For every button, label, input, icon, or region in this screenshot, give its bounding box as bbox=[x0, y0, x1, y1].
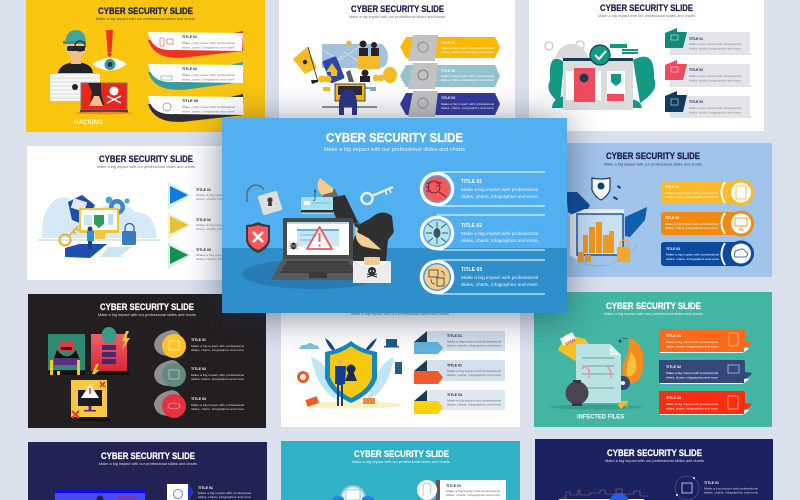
row: yellow arrow item: TITLE 01 bbox=[441, 41, 455, 45]
text: middle slide subtitle: Make a big impact with our professional slides and charts bbox=[351, 312, 449, 316]
row: orange pill item: Make a big impact with professional bbox=[665, 222, 718, 226]
icon: alert eye bbox=[92, 30, 127, 70]
row: navy flag item: slides, charts, infographics and more bbox=[689, 110, 742, 114]
row: main title 02: Make a big impact with professional bbox=[461, 231, 538, 236]
row: gold pill item: slides, charts, infographics and more bbox=[665, 195, 719, 199]
row: red blob item bbox=[154, 390, 245, 418]
row: yellow slide item 1 bbox=[148, 31, 243, 58]
row: yellow triangle item: TITLE 02 bbox=[196, 218, 211, 222]
row: main title 01 bbox=[420, 172, 545, 206]
row: red flag item bbox=[665, 60, 752, 87]
text: dark slide subtitle: Make a big impact with our professional slides and charts bbox=[98, 313, 196, 317]
row: main title 03: TITLE 03 bbox=[461, 267, 482, 273]
heading: top middle title: CYBER SECURITY SLIDE bbox=[351, 4, 444, 15]
heading: yellow slide title: CYBER SECURITY SLIDE bbox=[98, 6, 193, 17]
panel: yellow hacking slide bbox=[26, 0, 265, 132]
row: yellow blob item: TITLE 01 bbox=[191, 338, 206, 342]
icon: secure computer illustration bbox=[38, 195, 160, 258]
icon: infected file illustration bbox=[550, 332, 643, 410]
row: yellow arrow item: Make a big impact with professional bbox=[441, 46, 494, 50]
row: yellow slide item 3: slides, charts, infographics and more. bbox=[182, 110, 235, 114]
row: orange pill item bbox=[661, 210, 754, 236]
row: orange arrow panel: Make a big impact with professional bbox=[447, 369, 502, 373]
panel: green infected files slide bbox=[534, 292, 772, 427]
icon: city network illustration bbox=[559, 489, 648, 500]
text: top middle subtitle: Make a big impact with our professional slides and charts bbox=[349, 15, 445, 19]
row: navy speech item bbox=[659, 360, 753, 384]
row: navy flag item: Make a big impact with professional bbox=[689, 106, 741, 110]
icon: infected envelope bbox=[353, 257, 391, 283]
panel: top right slide with flags bbox=[529, 0, 764, 131]
row: teal slide item: TITLE 01 bbox=[446, 484, 461, 488]
row: main title 03: Make a big impact with professional bbox=[461, 275, 538, 280]
panel: white slide with triangles bbox=[27, 146, 265, 280]
row: teal slide item: slides, charts, infographics and more bbox=[446, 493, 501, 497]
row: bottom left item: TITLE 01 bbox=[198, 486, 213, 490]
heading: dark slide title: CYBER SECURITY SLIDE bbox=[100, 302, 194, 313]
icon: blue browser window bbox=[55, 490, 145, 500]
row: yellow arrow panel: Make a big impact with professional bbox=[447, 398, 502, 402]
icon: hacker card bbox=[46, 334, 85, 375]
row: yellow triangle item: Make a big impact bbox=[196, 223, 226, 227]
row: main title 02: TITLE 02 bbox=[461, 223, 482, 229]
row: teal flag item: slides, charts, infographics and more bbox=[689, 46, 742, 50]
row: yellow slide item 2: Make a big impact with professional bbox=[182, 73, 235, 77]
text: yellow slide subtitle: Make a big impact with our professional slides and charts bbox=[96, 17, 195, 21]
row: green triangle item: Make a big impact bbox=[196, 253, 226, 257]
row: yellow slide item 1: Make a big impact with professional bbox=[182, 41, 235, 45]
row: orange arrow panel: TITLE 02 bbox=[447, 364, 462, 368]
row: teal slide item bbox=[417, 480, 506, 500]
row: teal flag item: TITLE 01 bbox=[689, 37, 703, 41]
panel: bottom left navy slide bbox=[28, 442, 267, 500]
label: infected files: INFECTED FILES bbox=[577, 414, 624, 420]
row: yellow blob item bbox=[154, 330, 245, 358]
row: navy flag item: TITLE 03 bbox=[689, 100, 703, 104]
row: navy flag item bbox=[665, 91, 752, 118]
row: green blob item: Make a big impact with professional bbox=[191, 373, 244, 377]
row: yellow slide item 3: Make a big impact with professional bbox=[182, 105, 235, 109]
row: light blue arrow item: Make a big impact with professional bbox=[441, 74, 494, 78]
row: teal slide item: Make a big impact with professional bbox=[446, 489, 501, 493]
row: bottom right item: slides, charts, infographics and more bbox=[704, 490, 759, 494]
row: yellow slide item 3: TITLE 03 bbox=[182, 99, 198, 103]
row: green blob item: TITLE 02 bbox=[191, 367, 206, 371]
row: blue arrow panel: Make a big impact with professional bbox=[447, 340, 502, 344]
icon: hackers stealing money illustration bbox=[293, 40, 397, 115]
row: yellow arrow panel: TITLE 03 bbox=[447, 393, 462, 397]
text: green slide subtitle: Make a big impact with our professional slides and charts bbox=[604, 312, 703, 316]
row: gold pill item: Make a big impact with professional bbox=[665, 191, 718, 195]
row: yellow blob item: slides, charts, infographics and more bbox=[191, 348, 245, 352]
row: yellow triangle item: slides, charts, infogr bbox=[196, 227, 226, 231]
row: orange speech item: TITLE 01 bbox=[666, 334, 681, 338]
row: main title 03: slides, charts, infographics and more. bbox=[461, 282, 539, 287]
icon: warning shield bbox=[246, 222, 270, 253]
row: main title 02 bbox=[420, 215, 545, 250]
row: bottom left item: slides, charts, infographics and more bbox=[198, 495, 252, 499]
icon: shield and businessman illustration bbox=[297, 338, 402, 408]
icon: server card with skull bbox=[91, 327, 131, 376]
row: yellow arrow panel bbox=[414, 390, 505, 414]
row: orange pill item: slides, charts, infographics and more bbox=[665, 226, 719, 230]
row: red flag item: Make a big impact with professional bbox=[689, 74, 741, 78]
row: yellow slide item 1: TITLE 01 bbox=[182, 35, 197, 39]
icon: verified browser illustration bbox=[545, 41, 655, 110]
row: bottom left item bbox=[167, 484, 252, 500]
text: blue slide subtitle: Make a big impact with our professional slides and charts bbox=[604, 162, 702, 166]
row: navy pill item: Make a big impact with professional bbox=[666, 252, 719, 256]
icon: open padlock bbox=[247, 185, 282, 215]
row: indigo arrow item: TITLE 03 bbox=[441, 96, 455, 100]
heading: bottom left title: CYBER SECURITY SLIDE bbox=[101, 451, 195, 462]
row: yellow slide item 2: slides, charts, infographics and more. bbox=[182, 78, 235, 82]
row: bottom right item bbox=[675, 476, 759, 500]
row: teal flag item: Make a big impact with professional bbox=[689, 42, 741, 46]
row: indigo arrow item bbox=[400, 91, 500, 117]
row: light blue arrow item: slides, charts, infographics and more bbox=[441, 78, 495, 82]
row: blue triangle item: slides, charts, infogr bbox=[196, 197, 226, 201]
text: bottom left subtitle: Make a big impact with our professional slides and charts bbox=[99, 462, 197, 466]
panel: main blue cyber security slide bbox=[222, 118, 567, 313]
row: yellow arrow item bbox=[400, 35, 500, 61]
row: green blob item bbox=[154, 360, 245, 387]
icon: laptop with warning bbox=[271, 218, 367, 280]
row: orange arrow panel bbox=[414, 360, 505, 384]
row: orange speech item: slides, charts, infographics and more bbox=[666, 344, 719, 348]
row: green blob item: slides, charts, infographics and more bbox=[191, 377, 245, 381]
row: yellow arrow item: slides, charts, infographics and more bbox=[441, 50, 495, 54]
row: yellow blob item: Make a big impact with professional bbox=[191, 344, 244, 348]
icon: warning card bbox=[71, 380, 111, 421]
row: blue arrow panel: TITLE 01 bbox=[447, 334, 462, 338]
row: yellow slide item 2: TITLE 02 bbox=[182, 67, 197, 71]
text: top right subtitle: Make a big impact with our professional slides and charts bbox=[598, 14, 695, 18]
row: green triangle item bbox=[168, 242, 226, 269]
row: indigo arrow item: slides, charts, infographics and more bbox=[441, 106, 495, 110]
row: orange pill item: TITLE 02 bbox=[665, 216, 679, 220]
row: red flag item: slides, charts, infographics and more bbox=[689, 78, 742, 82]
icon: hacker with laptop bbox=[50, 30, 132, 114]
row: bottom right item: Make a big impact with professional bbox=[704, 486, 759, 490]
row: navy speech item: TITLE 02 bbox=[666, 365, 681, 369]
row: light blue arrow item: TITLE 02 bbox=[441, 69, 455, 73]
panel: top middle slide with arrows bbox=[279, 0, 515, 131]
heading: green slide title: CYBER SECURITY SLIDE bbox=[606, 301, 701, 312]
row: main title 01: Make a big impact with professional bbox=[461, 187, 538, 192]
text: main subtitle: Make a big impact with our professional slides and charts bbox=[324, 147, 466, 153]
row: teal flag item bbox=[665, 28, 752, 55]
row: gold pill item: TITLE 01 bbox=[665, 185, 679, 189]
row: red flag item: TITLE 02 bbox=[689, 68, 703, 72]
row: green triangle item: slides, charts, infogr bbox=[196, 257, 226, 261]
icon: credit card on hook bbox=[301, 178, 358, 228]
row: blue triangle item: Make a big impact bbox=[196, 193, 226, 197]
row: main title 03 bbox=[420, 260, 545, 294]
heading: teal slide title: CYBER SECURITY SLIDE bbox=[354, 449, 449, 460]
row: navy speech item: Make a big impact with professional bbox=[666, 371, 718, 375]
heading: bottom right title: CYBER SECURITY SLIDE bbox=[607, 448, 702, 459]
row: main title 01: slides, charts, infographics and more. bbox=[461, 194, 539, 199]
panel: bottom right navy slide bbox=[535, 439, 773, 500]
row: light blue arrow item bbox=[400, 63, 500, 89]
icon: infected file illustration: SPAM bbox=[564, 337, 577, 347]
row: navy pill item: slides, charts, infographics and more bbox=[666, 257, 720, 261]
icon: ground shadow bbox=[242, 259, 386, 289]
icon: hacker in hat bbox=[352, 212, 394, 262]
row: red speech item: Make a big impact with professional bbox=[666, 402, 718, 406]
heading: blue slide title: CYBER SECURITY SLIDE bbox=[606, 151, 700, 162]
row: blue arrow panel: slides, charts, infographics and more bbox=[447, 344, 502, 348]
row: navy pill item bbox=[661, 240, 754, 266]
row: blue arrow panel bbox=[414, 331, 505, 354]
row: bottom left item: Make a big impact with professional bbox=[198, 491, 251, 495]
row: orange speech item bbox=[659, 329, 753, 353]
panel: bottom middle teal slide bbox=[281, 441, 520, 500]
heading: main title: CYBER SECURITY SLIDE bbox=[326, 130, 463, 145]
icon: key bbox=[362, 187, 393, 204]
row: yellow slide item 1: slides, charts, infographics and more. bbox=[182, 46, 235, 50]
text: white slide subtitle: Make a big impact with our professional slides and charts bbox=[97, 165, 195, 169]
label: hacking: HACKING bbox=[74, 120, 103, 126]
row: orange speech item: Make a big impact with professional bbox=[666, 340, 718, 344]
text: teal slide subtitle: Make a big impact with our professional slides and charts bbox=[352, 460, 450, 464]
row: navy speech item: slides, charts, infographics and more bbox=[666, 376, 719, 380]
row: yellow triangle item bbox=[168, 212, 226, 239]
row: main title 01: TITLE 01 bbox=[461, 179, 482, 185]
row: main title 02: slides, charts, infographics and more. bbox=[461, 238, 539, 243]
icon: cloud lock illustration bbox=[332, 485, 374, 500]
row: bottom right item: TITLE 01 bbox=[704, 481, 719, 485]
row: gold pill item bbox=[661, 180, 754, 206]
panel: middle white slide with shield bbox=[281, 295, 520, 427]
row: blue triangle item bbox=[168, 182, 226, 209]
panel: dark slide with robot cards bbox=[28, 294, 266, 428]
row: red blob item: Make a big impact with professional bbox=[191, 403, 244, 407]
row: red blob item: slides, charts, infographics and more bbox=[191, 407, 245, 411]
row: red blob item: TITLE 03 bbox=[191, 397, 206, 401]
heading: white slide title: CYBER SECURITY SLIDE bbox=[99, 154, 193, 165]
row: orange arrow panel: slides, charts, infographics and more bbox=[447, 373, 502, 377]
row: red speech item bbox=[659, 391, 753, 415]
text: bottom right subtitle: Make a big impact with our professional slides and charts bbox=[605, 459, 704, 463]
row: navy pill item: TITLE 03 bbox=[666, 247, 680, 251]
heading: top right title: CYBER SECURITY SLIDE bbox=[600, 3, 693, 14]
row: blue triangle item: TITLE 01 bbox=[196, 188, 211, 192]
row: yellow arrow panel: slides, charts, infographics and more bbox=[447, 402, 502, 406]
icon: vault and coins illustration bbox=[566, 178, 647, 266]
row: indigo arrow item: Make a big impact with professional bbox=[441, 102, 494, 106]
row: red speech item: TITLE 03 bbox=[666, 396, 681, 400]
row: yellow slide item 2 bbox=[148, 62, 243, 90]
row: yellow slide item 3 bbox=[148, 94, 244, 122]
panel: right blue slide with vault bbox=[530, 143, 772, 277]
row: red speech item: slides, charts, infographics and more bbox=[666, 406, 719, 410]
row: green triangle item: TITLE 03 bbox=[196, 248, 211, 252]
